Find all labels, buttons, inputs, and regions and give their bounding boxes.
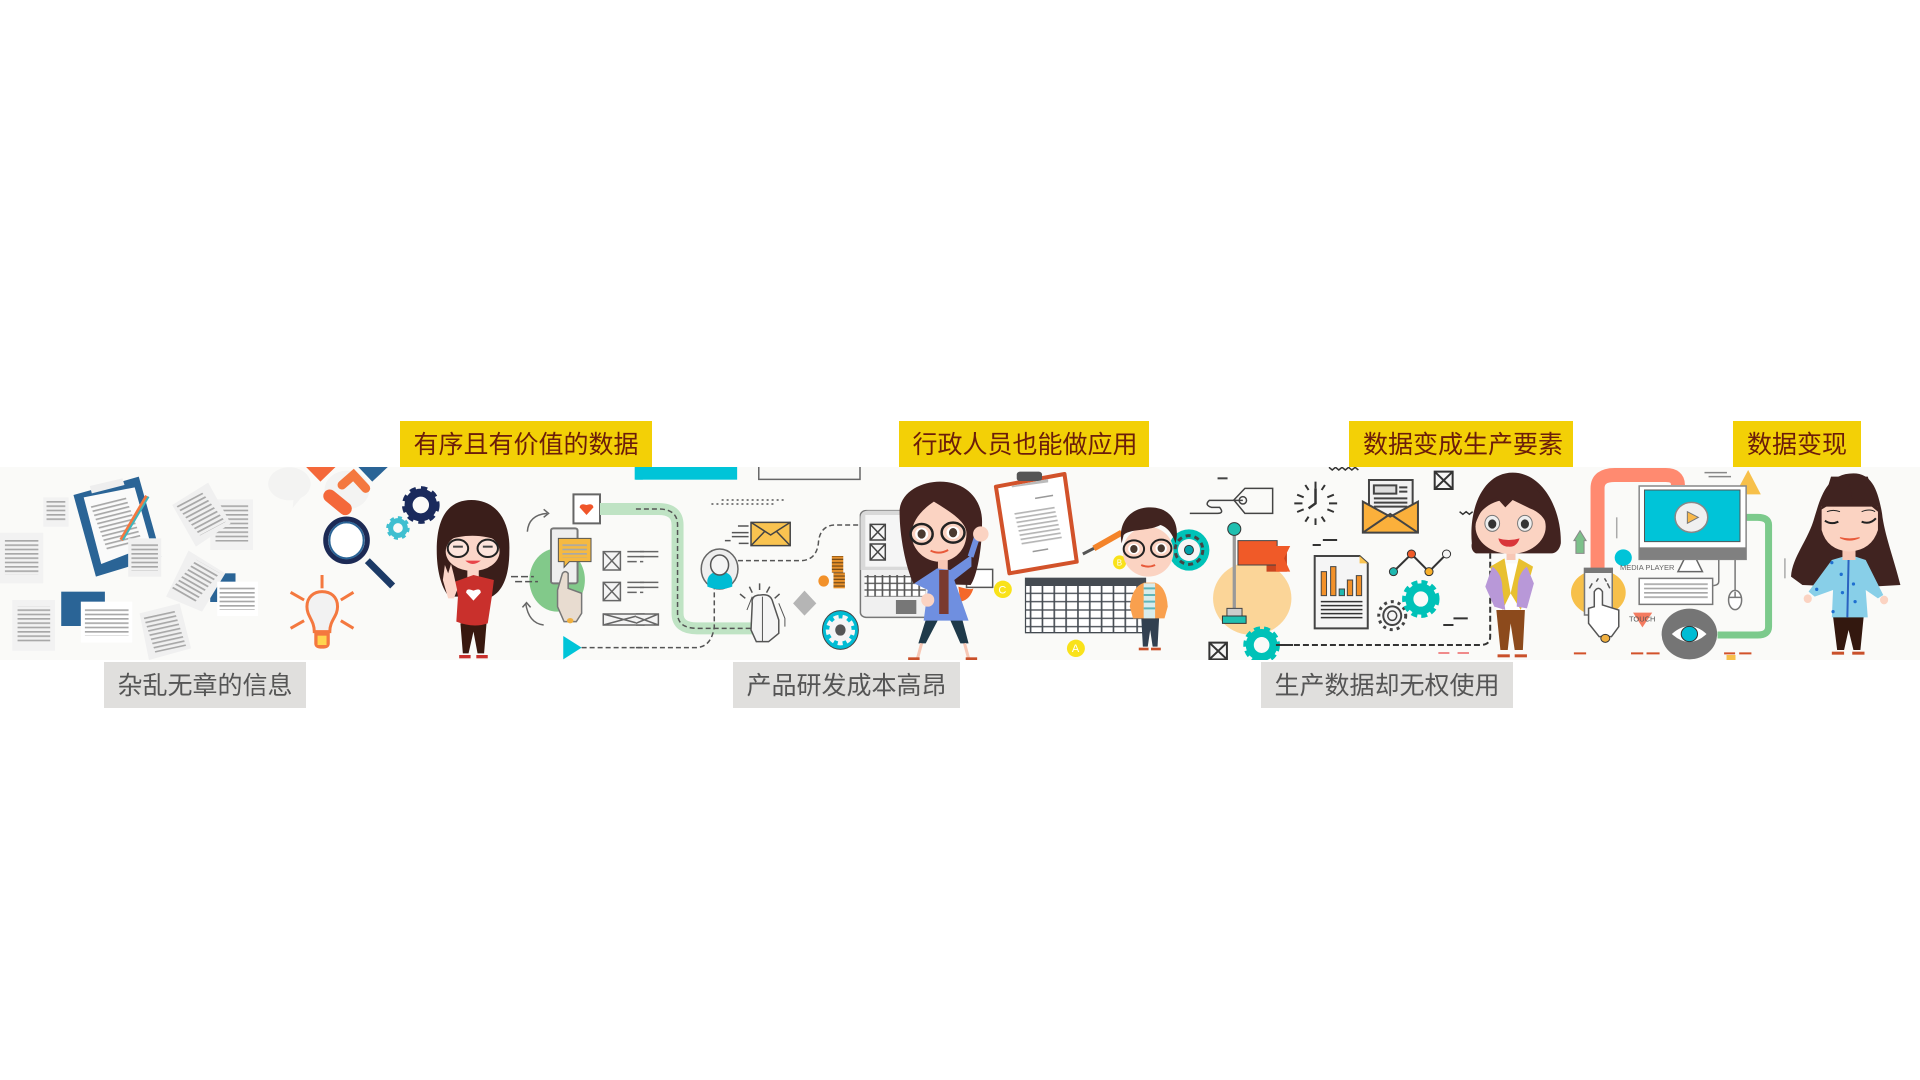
icon: red flag xyxy=(1213,523,1291,635)
dashes xyxy=(1313,540,1468,625)
panel: production factors and data monetisation xyxy=(1276,467,1900,660)
icon: teal dot xyxy=(1615,549,1632,566)
label: 有序且有价值的数据: 有序且有价值的数据 xyxy=(413,431,638,459)
label: 数据变成生产要素 xyxy=(1349,421,1573,467)
icon: teal play triangle xyxy=(563,636,582,659)
dashed connector to girl xyxy=(1280,644,1293,646)
label: 产品研发成本高昂 xyxy=(733,662,960,708)
decorative zigzag xyxy=(1329,467,1473,514)
dashed connector start xyxy=(582,647,644,649)
character: boy with glasses xyxy=(1121,507,1177,650)
label: 行政人员也能做应用 xyxy=(899,421,1149,467)
label: 有序且有价值的数据 xyxy=(400,421,652,467)
icon: grey diamond xyxy=(793,591,816,616)
label: 杂乱无章的信息: 杂乱无章的信息 xyxy=(117,672,292,700)
panel: messy information and first girl xyxy=(0,467,644,660)
icon: light bulb xyxy=(291,575,353,649)
icon: coin A: A xyxy=(1072,643,1080,655)
green data path start xyxy=(600,503,636,515)
icon: coin B: B xyxy=(1117,558,1122,567)
icon: eye xyxy=(1662,609,1717,659)
dotted lines xyxy=(711,500,784,504)
icon: wireframe box xyxy=(1435,472,1453,489)
icon: coin C xyxy=(994,581,1012,598)
green data path xyxy=(636,509,754,628)
vertical mark xyxy=(1784,558,1786,578)
small white card xyxy=(967,569,993,587)
icon: clock xyxy=(1294,482,1337,525)
icon: open envelope xyxy=(1363,480,1418,533)
empty outline box xyxy=(759,467,860,479)
media player label: MEDIA PLAYER xyxy=(1620,563,1675,572)
icon: teal gear flag base xyxy=(1245,628,1278,662)
computer monitor xyxy=(1639,486,1746,572)
icon: speech bubble xyxy=(268,467,311,508)
wireframe lines xyxy=(640,552,658,592)
icon: yellow triangle xyxy=(1735,470,1761,494)
icon: laptop wireframe xyxy=(860,511,930,617)
icon: clapping hands xyxy=(740,583,785,642)
teal bar start xyxy=(635,467,643,480)
label: 生产数据却无权使用 xyxy=(1261,662,1513,708)
diagram: media player workflow xyxy=(1438,470,1769,660)
icon: document with bar chart xyxy=(1315,556,1368,628)
label: 生产数据却无权使用: 生产数据却无权使用 xyxy=(1274,672,1500,700)
vertical marks xyxy=(1616,517,1618,538)
dashed connector xyxy=(636,525,858,648)
icon: magnifier xyxy=(326,519,393,586)
icon: teal gear badge xyxy=(1169,529,1209,571)
icon: touch phone with hand xyxy=(1571,568,1626,642)
icon: user avatar xyxy=(701,549,738,589)
messy documents xyxy=(0,477,258,660)
label: 数据变现 xyxy=(1733,421,1861,467)
dashed connector xyxy=(1276,553,1490,645)
icon: gears xyxy=(388,489,437,538)
icon: coins xyxy=(818,556,845,588)
icon: coin A xyxy=(1067,640,1085,657)
bottom dashes xyxy=(1438,652,1469,654)
icon: gears xyxy=(1379,582,1438,630)
label: 产品研发成本高昂: 产品研发成本高昂 xyxy=(746,672,946,700)
diagram: phone with chat and pointing hand xyxy=(511,509,591,625)
keyboard wireframe xyxy=(1639,578,1713,604)
wireframe box end xyxy=(636,614,658,625)
icon: mouse xyxy=(1713,560,1742,610)
character: smiling girl in purple jacket xyxy=(1471,473,1561,657)
icon: pencil xyxy=(1083,533,1122,554)
illustration band xyxy=(0,467,1900,660)
icon: envelope xyxy=(725,522,790,546)
label: 行政人员也能做应用: 行政人员也能做应用 xyxy=(912,431,1138,459)
touch label: TOUCH xyxy=(1629,614,1655,623)
label: 数据变现: 数据变现 xyxy=(1747,431,1847,459)
icon: heart card xyxy=(573,494,600,523)
icon: price tag xyxy=(1190,478,1273,513)
icon: teal gear xyxy=(822,611,858,649)
label: 数据变成生产要素: 数据变成生产要素 xyxy=(1363,431,1563,459)
icon: keyboard xyxy=(1025,578,1146,633)
character: girl with raised fist xyxy=(900,482,989,660)
icon: green arrow xyxy=(1574,531,1586,553)
icon: handshake xyxy=(306,467,388,509)
icon: coin B xyxy=(1113,555,1126,569)
green data tube xyxy=(1718,517,1769,635)
coral data tube xyxy=(1598,475,1678,568)
character: long-haired girl in blue dress xyxy=(1791,473,1900,655)
icon: coin C: C xyxy=(998,584,1006,596)
icon: red triangle xyxy=(1633,613,1652,627)
teal bar xyxy=(636,467,737,480)
dashes xyxy=(1704,473,1731,477)
flag notch xyxy=(1276,546,1290,572)
icon: clipboard xyxy=(996,472,1077,573)
icon: line chart xyxy=(1389,550,1451,576)
panel: product cost and admin staff xyxy=(636,467,1293,662)
label: 杂乱无章的信息 xyxy=(104,662,306,708)
icon: wireframe box xyxy=(1209,643,1227,659)
character: girl in red shirt xyxy=(437,500,509,658)
wireframe boxes xyxy=(603,552,644,625)
